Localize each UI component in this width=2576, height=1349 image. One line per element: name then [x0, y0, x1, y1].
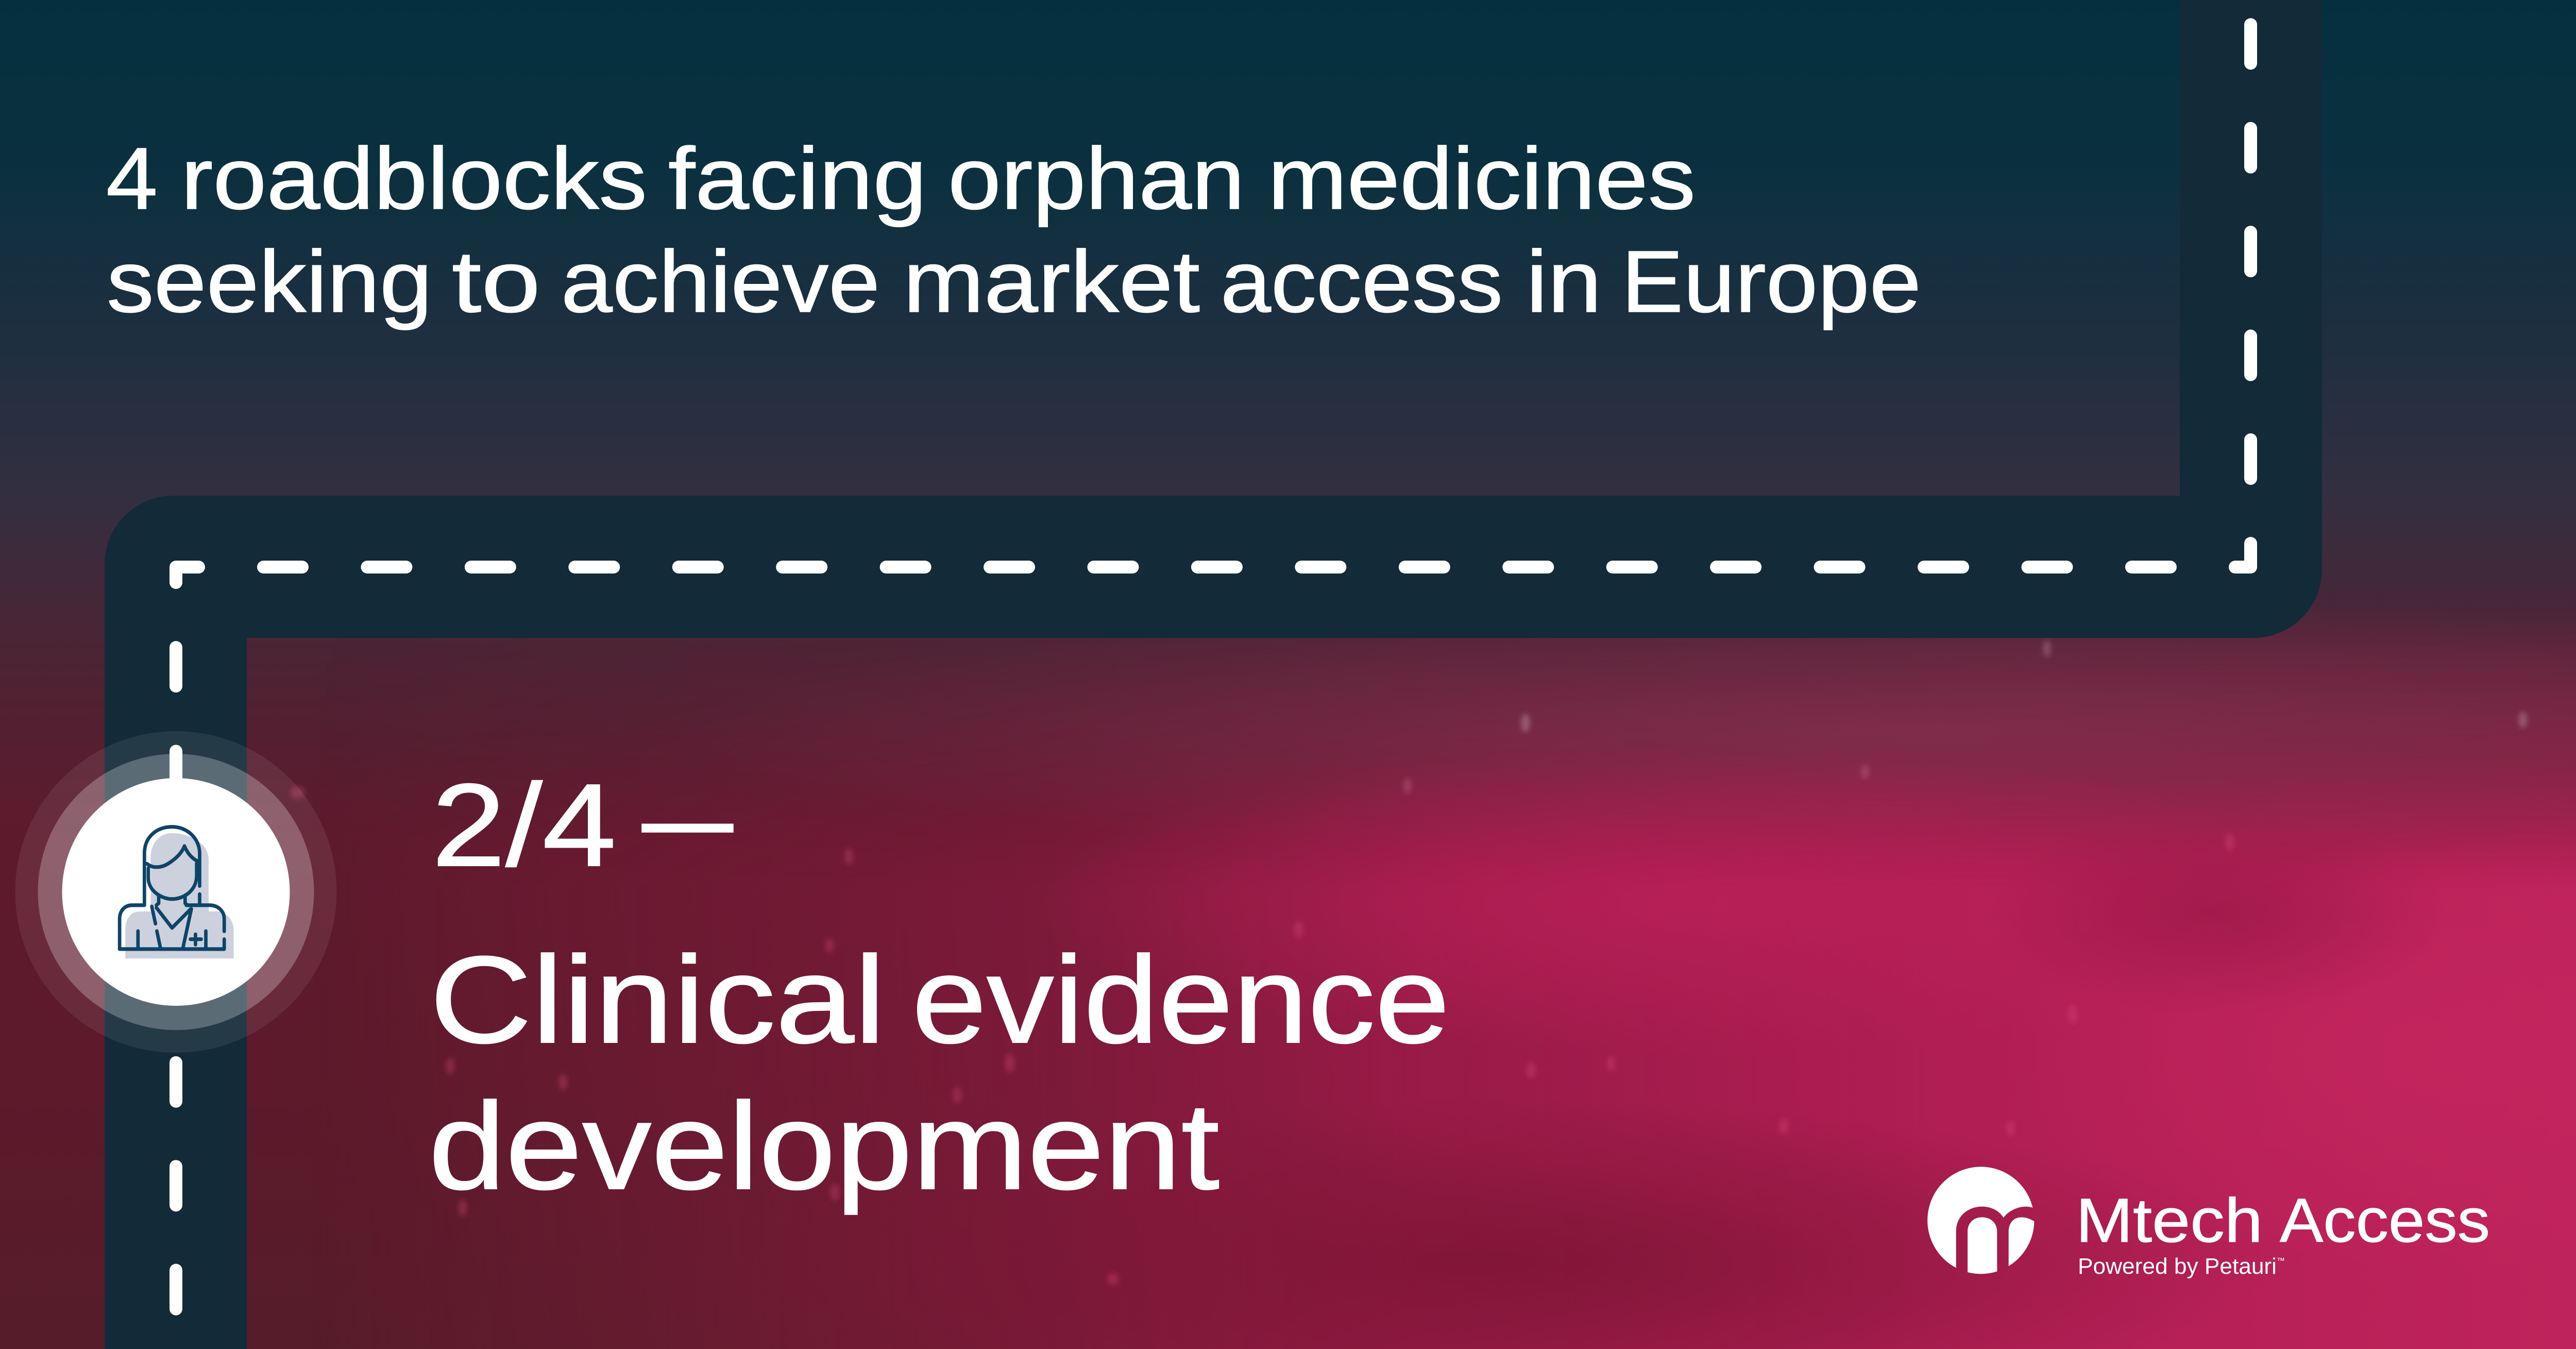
title: facing: [668, 130, 927, 228]
background specks: [291, 640, 2527, 1285]
icon: doctor: [120, 827, 234, 958]
step number: —: [642, 752, 733, 883]
title: seeking: [107, 233, 432, 331]
title: in: [1526, 233, 1602, 331]
step number: 2/4: [432, 760, 616, 891]
title: to: [452, 233, 540, 331]
title: access: [1221, 233, 1503, 331]
roadblock heading: [429, 931, 1450, 1215]
logo wordmark: ™: [2277, 1257, 2285, 1266]
title: orphan: [948, 130, 1245, 228]
title: roadblocks: [181, 130, 647, 228]
icon halo rings: [15, 731, 337, 1053]
title: Europe: [1621, 233, 1921, 331]
title: [106, 130, 1921, 331]
title: medicines: [1268, 130, 1696, 228]
title: achieve: [561, 233, 880, 331]
roadblock heading: development: [429, 1077, 1219, 1215]
logo mark: [1927, 1167, 2034, 1274]
title: market: [903, 233, 1200, 331]
icon circle: clinician: [62, 778, 290, 1006]
title: 4: [106, 130, 158, 228]
step number: [432, 752, 733, 891]
roadblock heading: Clinical: [430, 931, 886, 1069]
logo wordmark: Mtech: [2076, 1185, 2263, 1255]
logo: [1927, 1167, 2488, 1278]
roadblock heading: evidence: [912, 931, 1450, 1069]
logo wordmark: Powered by Petauri: [2078, 1254, 2277, 1279]
road centre dashes: [176, 24, 2250, 1309]
logo wordmark: Access: [2280, 1185, 2490, 1255]
logo wordmark: [2076, 1185, 2490, 1279]
